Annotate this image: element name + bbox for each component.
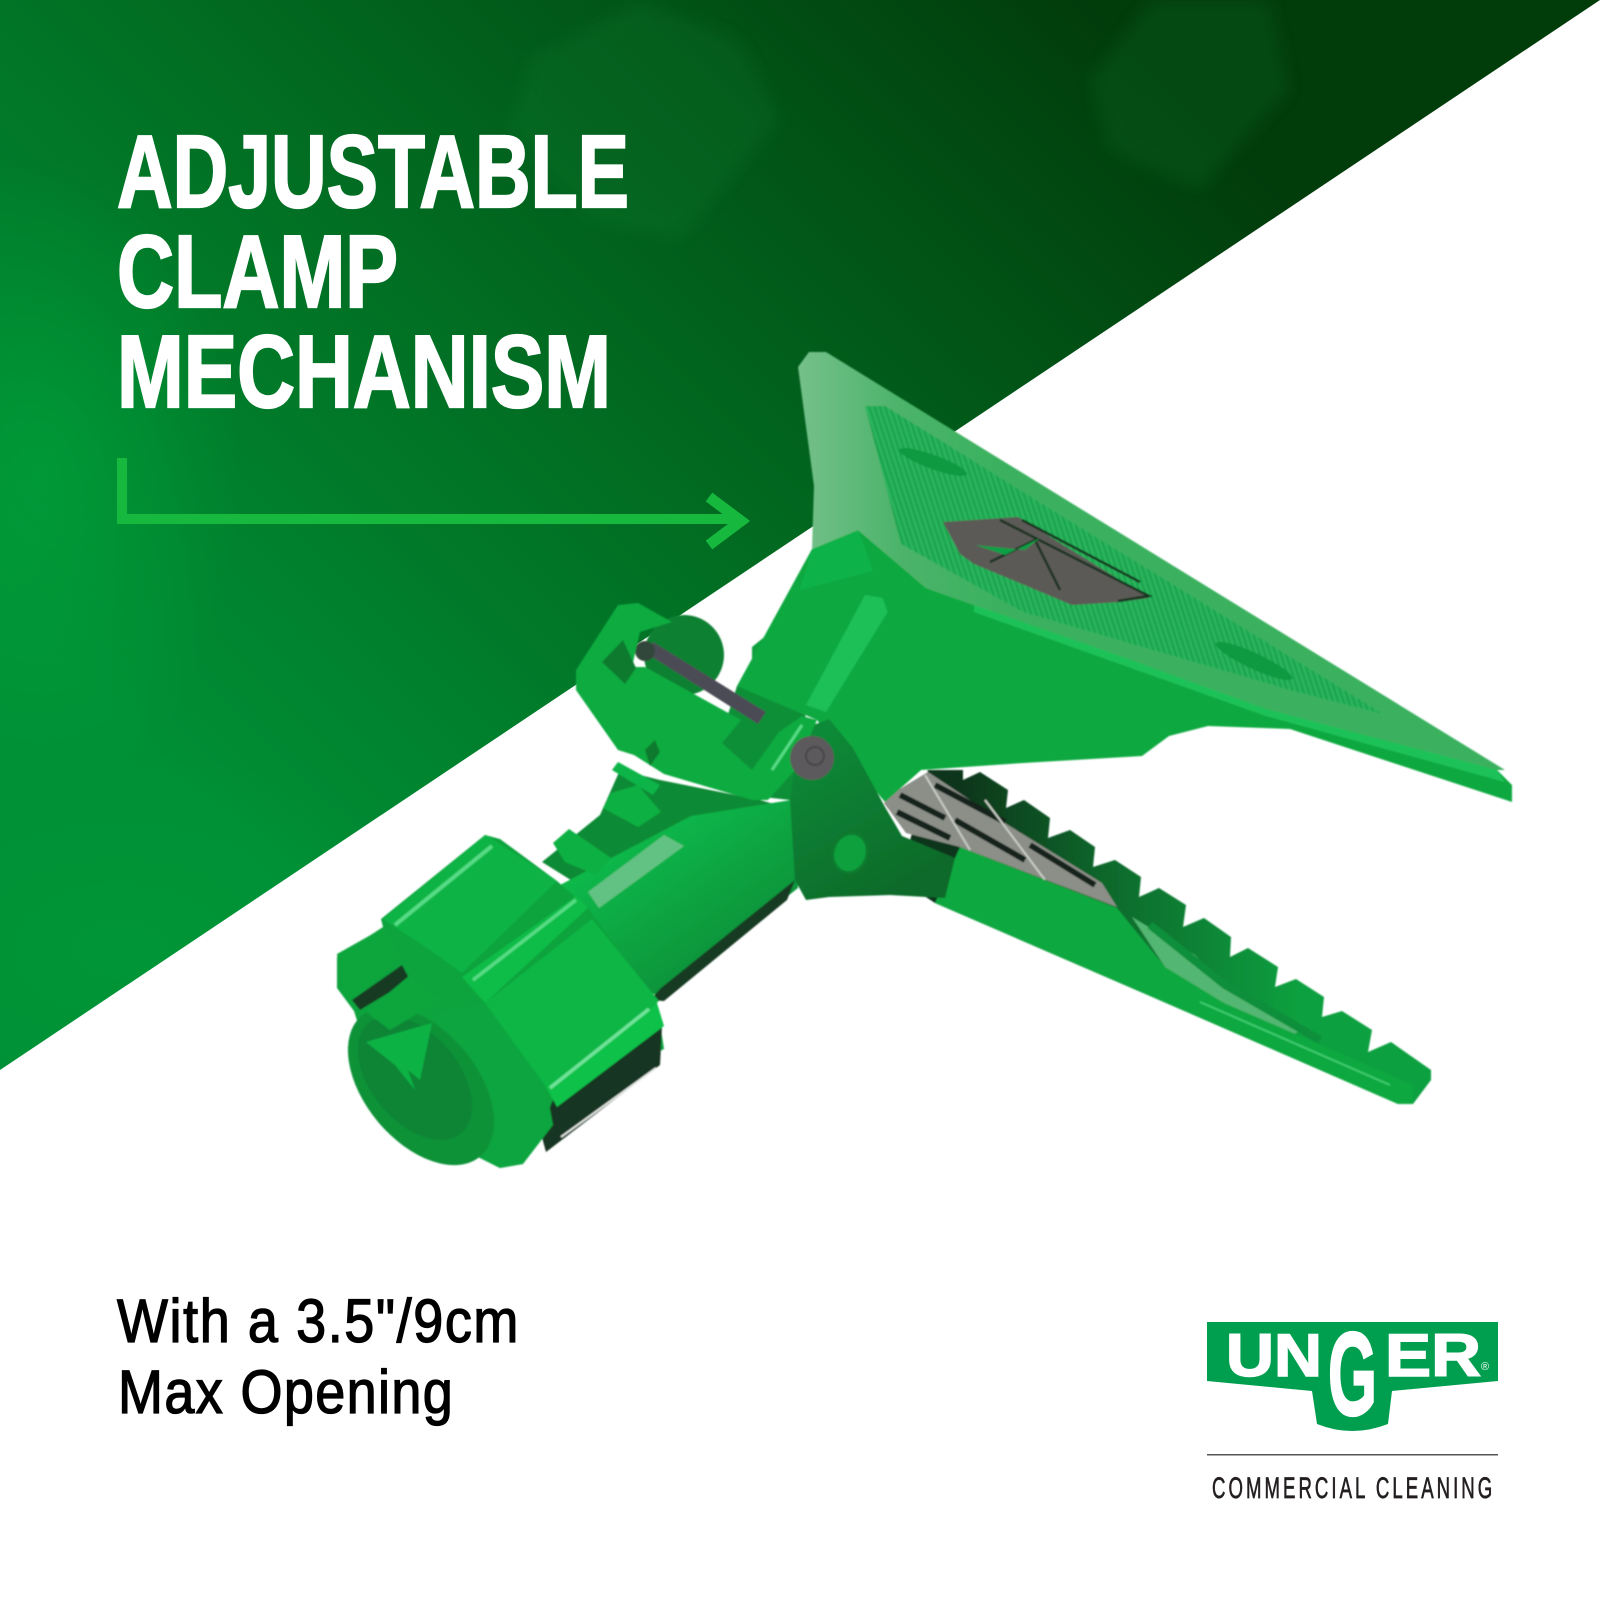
embossed logo xyxy=(943,517,1149,605)
latch lever with metal bar xyxy=(576,603,834,800)
handle tube xyxy=(542,762,798,1001)
neck and pivot housing xyxy=(720,530,974,900)
dark clip xyxy=(540,1026,662,1152)
end opening xyxy=(319,980,523,1192)
body text: Max Opening xyxy=(118,1359,453,1427)
upper jaw front face xyxy=(858,530,1512,802)
logo wordmark: ER xyxy=(1385,1322,1481,1389)
logo wordmark: UN xyxy=(1226,1322,1322,1389)
logo: Unger Commercial Cleaning xyxy=(1207,1309,1498,1505)
title: CLAMP xyxy=(117,214,398,329)
product photo: clamp xyxy=(319,352,1512,1192)
body text: With a 3.5"/9cm xyxy=(117,1288,518,1356)
title: MECHANISM xyxy=(117,314,611,429)
jaw side panel xyxy=(935,847,1413,1104)
logo badge xyxy=(1207,1322,1498,1431)
logo wordmark: G xyxy=(1328,1309,1377,1441)
grey interior xyxy=(884,772,1117,907)
logo wordmark xyxy=(1226,1309,1489,1441)
title: ADJUSTABLE xyxy=(117,114,629,229)
lower jaw with teeth xyxy=(884,770,1431,1104)
body text xyxy=(117,1288,518,1427)
logo divider xyxy=(1207,1454,1498,1456)
tabs xyxy=(612,762,660,795)
panel: green diagonal background xyxy=(0,0,1600,1150)
title xyxy=(117,114,629,429)
arrow xyxy=(122,458,741,545)
collar xyxy=(319,835,664,1192)
logo wordmark: ® xyxy=(1481,1361,1489,1373)
logo tagline: COMMERCIAL CLEANING xyxy=(1212,1472,1492,1505)
upper jaw top plate xyxy=(798,352,1505,770)
